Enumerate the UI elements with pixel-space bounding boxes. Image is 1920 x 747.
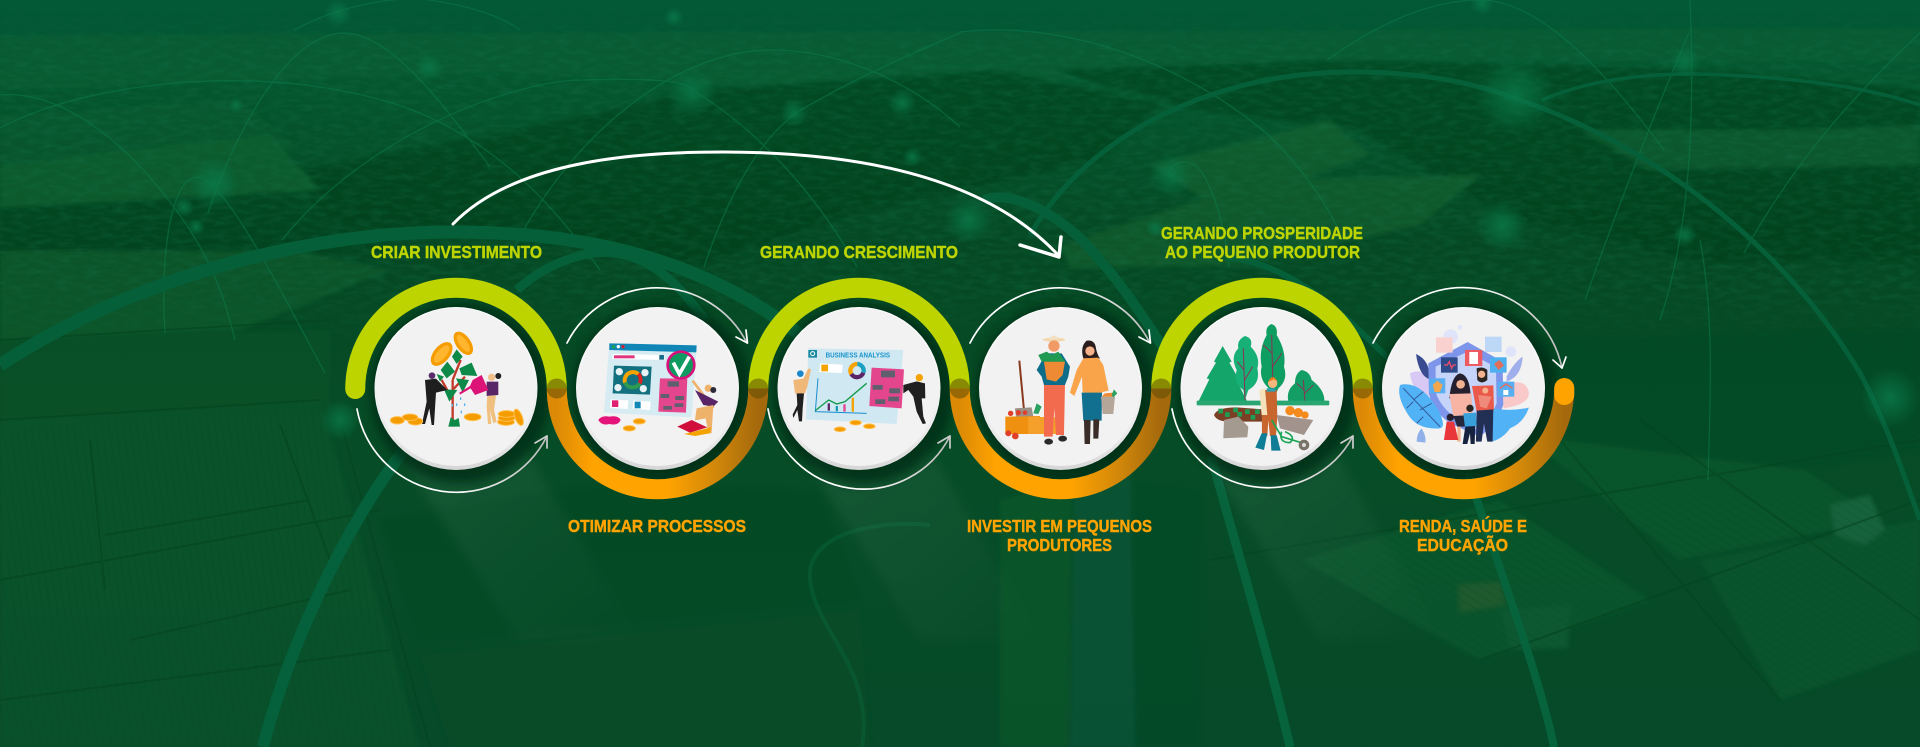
step label: renda, saude e educacao: EDUCAÇÃO xyxy=(1417,534,1508,555)
step label: investir em pequenos produtores xyxy=(967,516,1152,555)
illustration: business analysis board: BUSINESS ANALYSIS xyxy=(826,350,890,359)
ring junction overlaps xyxy=(547,378,1373,398)
step label: gerando prosperidade ao pequeno produtor xyxy=(1161,223,1363,262)
step label: renda, saude e educacao: RENDA, SAÚDE E xyxy=(1399,515,1527,536)
field and forest texture xyxy=(0,52,1920,302)
illustration: family protected by house shield xyxy=(1399,325,1529,444)
step label: criar investimento: CRIAR INVESTIMENTO xyxy=(371,242,542,262)
network glow nodes xyxy=(174,0,1920,440)
step label: gerando crescimento: GERANDO CRESCIMENTO xyxy=(760,242,958,262)
disc 3: gerando crescimento xyxy=(778,307,940,470)
step label: gerando prosperidade ao pequeno produtor: GERANDO PROSPERIDADE xyxy=(1161,223,1363,243)
disc 5: gerando prosperidade xyxy=(1180,307,1344,470)
disc 6: renda, saude e educacao xyxy=(1382,307,1545,470)
illustration: trees and farmer with wheelbarrow xyxy=(1197,324,1329,451)
illustration: dashboard with magnifier xyxy=(598,343,718,436)
shadows under the discs xyxy=(370,303,1558,640)
step label: gerando prosperidade ao pequeno produtor: AO PEQUENO PRODUTOR xyxy=(1165,242,1360,262)
white curved arrows xyxy=(357,288,1562,492)
illustration: farming couple with crops xyxy=(1005,335,1117,445)
disc 1: criar investimento xyxy=(374,307,538,470)
lime ring segments xyxy=(355,288,1363,388)
orange ring segments xyxy=(557,388,1564,489)
field boundaries xyxy=(0,240,1920,747)
disc 2: otimizar processos xyxy=(576,307,739,470)
road loop xyxy=(810,524,930,747)
start cap of first ring xyxy=(345,379,365,399)
arrowheads xyxy=(535,330,1566,448)
network arcs thin xyxy=(0,0,1920,480)
illustration: business analysis board xyxy=(793,348,926,432)
illustration: tree with coins, people watering xyxy=(390,328,525,427)
step label: otimizar processos: OTIMIZAR PROCESSOS xyxy=(568,516,746,536)
step label: investir em pequenos produtores: PRODUTORES xyxy=(1007,535,1112,555)
disc 4: investir em pequenos produtores xyxy=(979,307,1142,470)
step label: investir em pequenos produtores: INVESTIR EM PEQUENOS xyxy=(967,516,1152,536)
step label: renda, saude e educacao xyxy=(1399,515,1527,555)
big white arrow over the top xyxy=(453,152,1061,257)
